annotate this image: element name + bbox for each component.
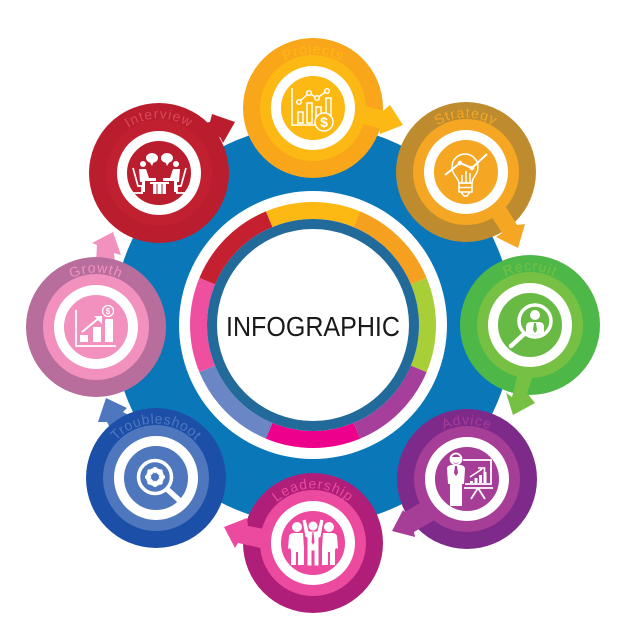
icon: growth chart: $ bbox=[106, 307, 111, 316]
arrow: Strategy bbox=[486, 197, 525, 248]
icon: chart with coin bbox=[292, 88, 333, 131]
label: Strategy: Strategy bbox=[434, 108, 497, 124]
icon: magnifier with person bbox=[511, 305, 551, 346]
node: Troubleshoot bbox=[86, 408, 226, 548]
title: INFOGRAPHIC bbox=[226, 311, 400, 342]
inner teal ring bbox=[212, 224, 414, 426]
label: Growth: Growth bbox=[70, 264, 122, 278]
label: Advice: Advice bbox=[444, 414, 490, 430]
arrow: Troubleshoot bbox=[98, 398, 132, 428]
arrow: Growth bbox=[92, 232, 121, 262]
arrow: Projects bbox=[355, 103, 403, 134]
label: Leadership: Leadership bbox=[272, 478, 352, 502]
node: Recruit bbox=[460, 255, 600, 415]
central blue disc bbox=[113, 125, 513, 525]
icon: chart with coin: $ bbox=[320, 114, 328, 130]
label: Recruit: Recruit bbox=[502, 263, 557, 276]
icon: meeting at table bbox=[132, 153, 187, 194]
arrow: Recruit bbox=[506, 370, 535, 415]
icon: light bulb with trend bbox=[445, 154, 487, 196]
icon: team of three bbox=[288, 519, 338, 566]
node: Strategy bbox=[396, 102, 536, 248]
arrow: Advice bbox=[392, 498, 438, 537]
node: Growth bbox=[26, 257, 166, 397]
node: Interview bbox=[89, 103, 235, 243]
icon: magnifier with gear bbox=[138, 460, 179, 500]
segmented colour ring bbox=[190, 202, 436, 448]
node: Projects bbox=[243, 38, 403, 178]
node: Leadership bbox=[224, 473, 383, 613]
label: Interview: Interview bbox=[124, 110, 192, 128]
node: Advice bbox=[392, 409, 537, 549]
arrow: Leadership bbox=[224, 518, 270, 550]
white ring bbox=[179, 191, 447, 459]
icon: presenter at board bbox=[447, 454, 493, 506]
arrow: Interview bbox=[190, 114, 235, 150]
label: Projects: Projects bbox=[282, 44, 342, 60]
label: Troubleshoot: Troubleshoot bbox=[110, 414, 200, 440]
